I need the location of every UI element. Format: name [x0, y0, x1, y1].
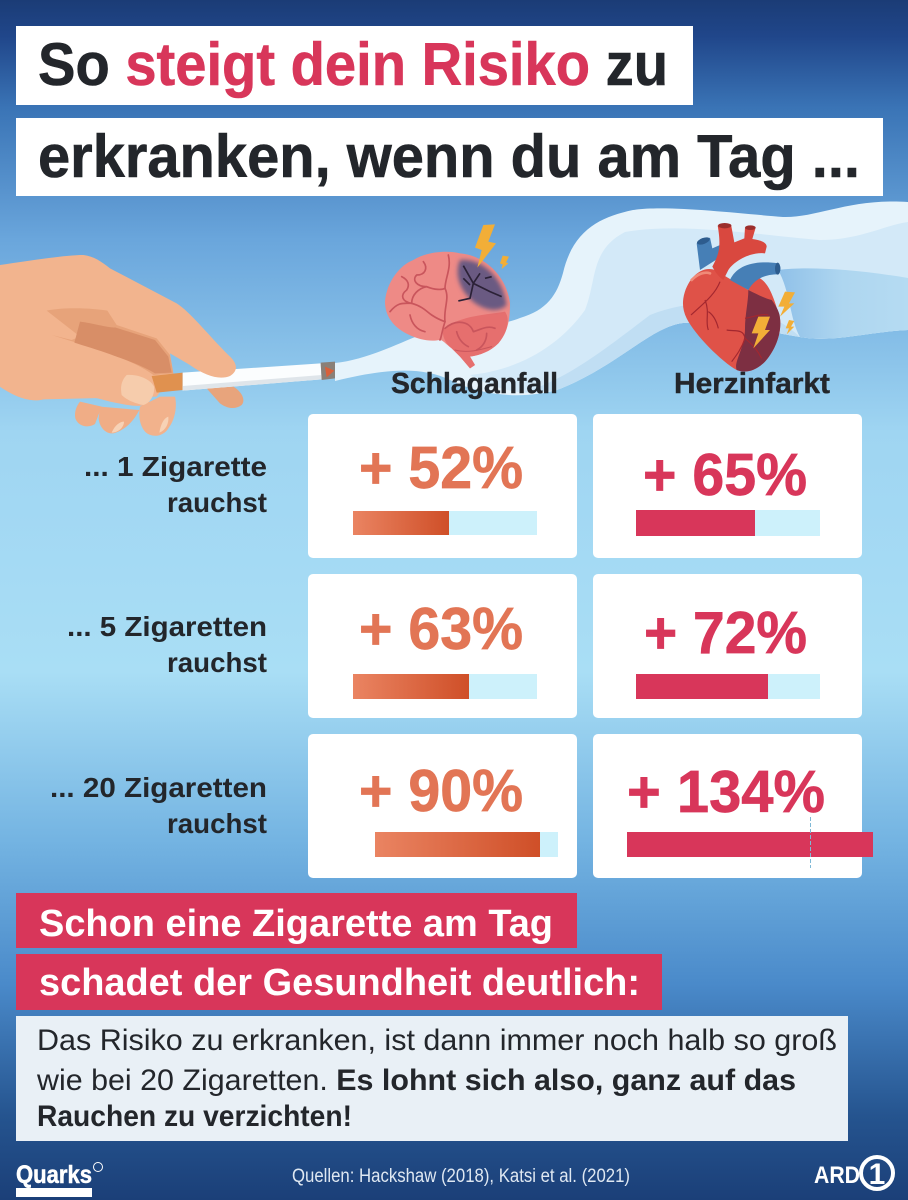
- icon: hand: [0, 255, 236, 400]
- panel: heart attack, 5 cigarettes: + 72%: [644, 600, 807, 666]
- panel: heart attack, 1 cigarette: + 65%: [643, 442, 807, 508]
- purple bruise: [458, 260, 507, 310]
- smoke: [335, 201, 908, 395]
- text block: [16, 1016, 848, 1141]
- text block: Das Risiko zu erkranken, ist dann immer noch halb so groß: [37, 1024, 837, 1057]
- icon: brain: [385, 224, 510, 368]
- icon: cigarette: [152, 362, 335, 393]
- icon: hand holding cigarette: [0, 255, 335, 436]
- row label: 20 Zigaretten: ... 20 Zigaretten: [50, 772, 267, 803]
- lower brain shade: [443, 312, 508, 368]
- icon: thumb: [0, 335, 153, 406]
- logo: ARD: [814, 1157, 893, 1191]
- icon: lightning: [475, 224, 496, 268]
- blue vessel left: [697, 238, 720, 270]
- heart body: [683, 269, 780, 372]
- panel: stroke, 20 cigarettes: [308, 734, 577, 878]
- column heading: Schlaganfall: Schlaganfall: [391, 368, 558, 400]
- panel: stroke, 5 cigarettes: + 63%: [359, 596, 523, 662]
- sources: Quellen: Hackshaw (2018), Katsi et al. (2021): [292, 1166, 630, 1187]
- row label: 5 Zigaretten: rauchst: [167, 647, 267, 678]
- text block: wie bei 20 Zigaretten. Es lohnt sich also, ganz auf das: [36, 1064, 796, 1097]
- row label: 20 Zigaretten: [50, 772, 267, 839]
- logo: ARD: ARD: [814, 1162, 860, 1189]
- icon: hand shadow: [47, 308, 173, 375]
- blue pulmonary: [730, 262, 780, 290]
- dark zone: [736, 290, 780, 372]
- callout heading: [16, 893, 662, 1010]
- highlight and vessels: [692, 273, 710, 280]
- icon: lower fingers: [75, 387, 243, 436]
- icon: thumbnail: [121, 375, 154, 405]
- icon: lightning: [752, 317, 770, 348]
- gyri lines: [390, 255, 495, 351]
- title: erkranken, wenn du am Tag ...: [38, 123, 860, 190]
- callout heading: Schon eine Zigarette am Tag: [39, 903, 553, 945]
- column heading: Herzinfarkt: Herzinfarkt: [674, 368, 830, 400]
- panel: heart attack, 5 cigarettes: [593, 574, 862, 718]
- panel: heart attack, 20 cigarettes: [593, 734, 873, 878]
- title: [16, 26, 883, 196]
- panel: heart attack, 20 cigarettes: + 134%: [627, 759, 825, 825]
- text block: Rauchen zu verzichten!: [37, 1100, 352, 1133]
- row label: 1 Zigarette: [84, 451, 267, 518]
- panel: stroke, 5 cigarettes: [308, 574, 577, 718]
- row label: 5 Zigaretten: [67, 611, 267, 678]
- cracks: [458, 266, 502, 301]
- logo: Quarks: Quarks: [16, 1161, 92, 1189]
- row label: 1 Zigarette: ... 1 Zigarette: [84, 451, 267, 482]
- callout heading: schadet der Gesundheit deutlich:: [39, 962, 640, 1004]
- row label: 20 Zigaretten: rauchst: [167, 808, 267, 839]
- aorta: [712, 224, 767, 280]
- icon: heart: [683, 223, 795, 372]
- row label: 5 Zigaretten: ... 5 Zigaretten: [67, 611, 267, 642]
- logo: ARD: 1: [869, 1158, 885, 1191]
- row label: 1 Zigarette: rauchst: [167, 487, 267, 518]
- panel: heart attack, 1 cigarette: [593, 414, 862, 558]
- panel: stroke, 20 cigarettes: + 90%: [359, 758, 523, 824]
- title: So steigt dein Risiko zu: [38, 31, 668, 98]
- panel: stroke, 1 cigarette: [308, 414, 577, 558]
- icon: index finger: [167, 348, 236, 378]
- panel: stroke, 1 cigarette: + 52%: [359, 435, 523, 501]
